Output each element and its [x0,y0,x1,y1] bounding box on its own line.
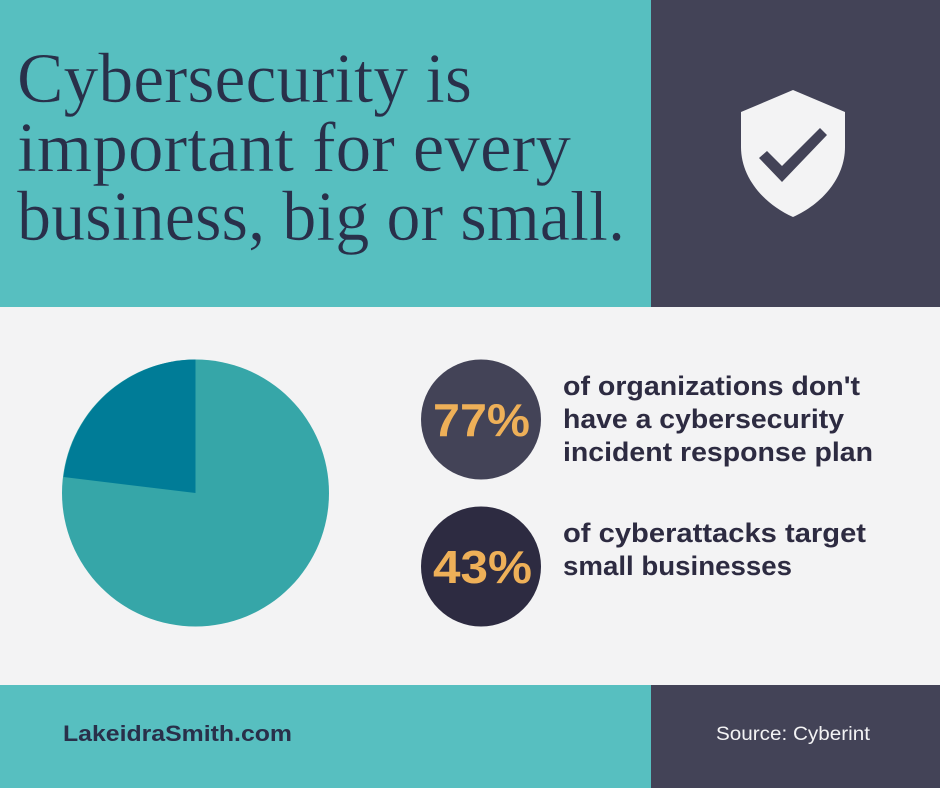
stat text: cyberattacks: small businesses [563,551,792,581]
footer source: Source: Cyberint [716,724,871,745]
icon: shield with check [741,90,845,217]
stat circle: 43% [421,506,541,626]
stat text: organizations: incident response plan [563,437,873,467]
stat circle: 77%: 77% [433,394,530,446]
title: important for every [17,109,571,187]
title [17,40,625,256]
footer panel: teal [0,685,651,788]
stat text: organizations: of organizations don't [563,371,860,401]
header panel: dark [651,0,940,307]
stat circle: 43%: 43% [433,541,532,593]
title: business, big or small. [17,178,625,256]
stat text: cyberattacks: of cyberattacks target [563,518,866,548]
footer website: LakeidraSmith.com [63,721,292,746]
stat text: organizations: have a cybersecurity [563,404,844,434]
stat text: cyberattacks [563,518,866,581]
header panel: teal [0,0,651,307]
stat circle: 77% [421,360,541,480]
footer panel: dark [651,685,940,788]
stat text: organizations [563,371,873,467]
title: Cybersecurity is [17,40,472,118]
pie chart [62,360,329,626]
